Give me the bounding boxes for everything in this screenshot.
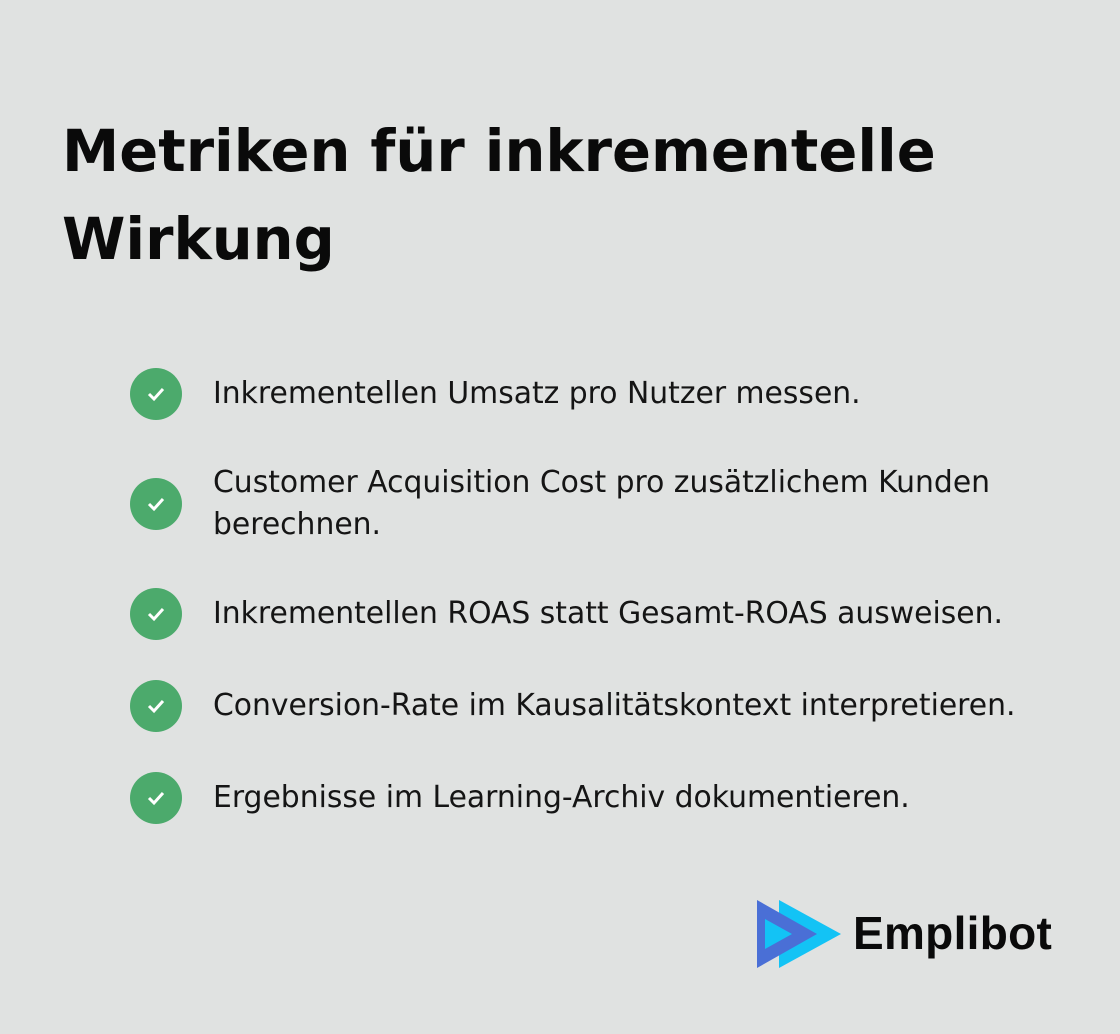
item 2: berechnen. <box>213 507 381 542</box>
title: Wirkung <box>62 206 335 273</box>
item 3: Inkrementellen ROAS statt Gesamt-ROAS ausweisen. <box>213 596 1003 631</box>
logo <box>757 900 1052 968</box>
logo text: Emplibot <box>853 907 1052 959</box>
title <box>62 118 936 273</box>
item 4: Conversion-Rate im Kausalitätskontext interpretieren. <box>213 688 1015 723</box>
item 5 <box>130 772 910 824</box>
item 4 <box>130 680 1015 732</box>
item 1 <box>130 368 861 420</box>
icon: logo triangles <box>757 900 841 968</box>
item 1: Inkrementellen Umsatz pro Nutzer messen. <box>213 376 861 411</box>
item 2: Customer Acquisition Cost pro zusätzlichem Kunden <box>213 465 990 500</box>
item 3 <box>130 588 1003 640</box>
item 2 <box>130 465 990 542</box>
item 5: Ergebnisse im Learning-Archiv dokumentieren. <box>213 780 910 815</box>
title: Metriken für inkrementelle <box>62 118 936 185</box>
